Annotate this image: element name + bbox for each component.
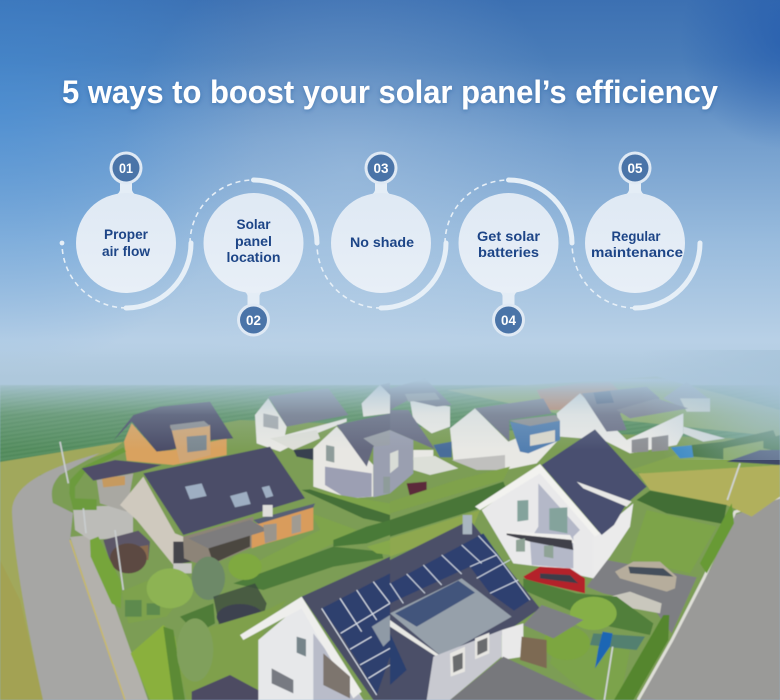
hedge and garden xyxy=(523,578,669,700)
step 04: get solar batteries: Get solar xyxy=(477,228,541,244)
car park xyxy=(587,560,697,633)
chimney xyxy=(463,515,472,534)
step 02: solar panel location: 02 xyxy=(246,312,261,328)
house: orange xyxy=(113,402,233,465)
solar house left part xyxy=(240,557,390,700)
carport right xyxy=(520,605,583,668)
ground fields xyxy=(0,385,780,700)
step 01: proper air flow xyxy=(60,152,191,308)
sky background xyxy=(0,0,780,400)
carport and hedge xyxy=(69,447,162,512)
house: gray upper xyxy=(255,388,348,460)
lawn left xyxy=(233,513,357,583)
step 03: no shade: No shade xyxy=(350,234,414,250)
step 03: no shade: 03 xyxy=(374,160,389,176)
trampoline xyxy=(213,583,267,630)
flag and lamp xyxy=(595,463,740,700)
house: white behind xyxy=(557,387,725,458)
dark roof far right xyxy=(727,450,780,465)
house: white front xyxy=(475,429,647,578)
step 01: proper air flow: air flow xyxy=(102,243,150,259)
right road xyxy=(638,497,780,700)
step 05: regular maintenance: 05 xyxy=(628,160,643,176)
shed and front hedge xyxy=(90,531,193,623)
lawn right xyxy=(390,467,510,513)
right half of scene xyxy=(390,377,780,700)
step 02: solar panel location: Solar xyxy=(236,216,271,232)
step 02: solar panel location: panel xyxy=(235,233,272,249)
house: large dark roof xyxy=(120,447,315,573)
step 05: regular maintenance: Regular xyxy=(612,228,661,244)
left road xyxy=(12,453,148,700)
lawn and bush lower xyxy=(131,600,287,700)
step 05: regular maintenance xyxy=(572,152,700,308)
house: far left continuation xyxy=(390,378,458,497)
step 02: solar panel location: location xyxy=(226,249,280,265)
step 01: proper air flow: Proper xyxy=(104,226,149,242)
house: white top right xyxy=(362,383,390,417)
step 04: get solar batteries xyxy=(445,180,572,336)
step 05: regular maintenance: maintenance xyxy=(591,244,683,260)
solar house main roof xyxy=(390,520,540,700)
right haze xyxy=(630,350,780,460)
title: 5 ways to boost your solar panel’s efficiency xyxy=(62,74,718,110)
top haze over the landscape xyxy=(0,350,780,450)
driveway bottom xyxy=(450,657,597,700)
aerial photo of solar neighbourhood xyxy=(0,377,780,700)
diagonal hedges xyxy=(233,520,390,590)
distant fields xyxy=(447,377,780,437)
step 03: no shade xyxy=(317,152,446,308)
hedges right xyxy=(390,430,780,573)
left half of scene xyxy=(60,383,390,700)
trees xyxy=(147,553,262,633)
cars xyxy=(523,562,677,613)
house: blue dormer xyxy=(450,398,560,470)
step 01: proper air flow: 01 xyxy=(119,160,133,176)
far houses xyxy=(537,382,710,412)
step 02: solar panel location xyxy=(190,180,317,336)
house: white right xyxy=(313,413,390,498)
step 04: get solar batteries: 04 xyxy=(501,312,516,328)
street lamp xyxy=(60,442,123,590)
step 04: get solar batteries: batteries xyxy=(478,244,539,260)
